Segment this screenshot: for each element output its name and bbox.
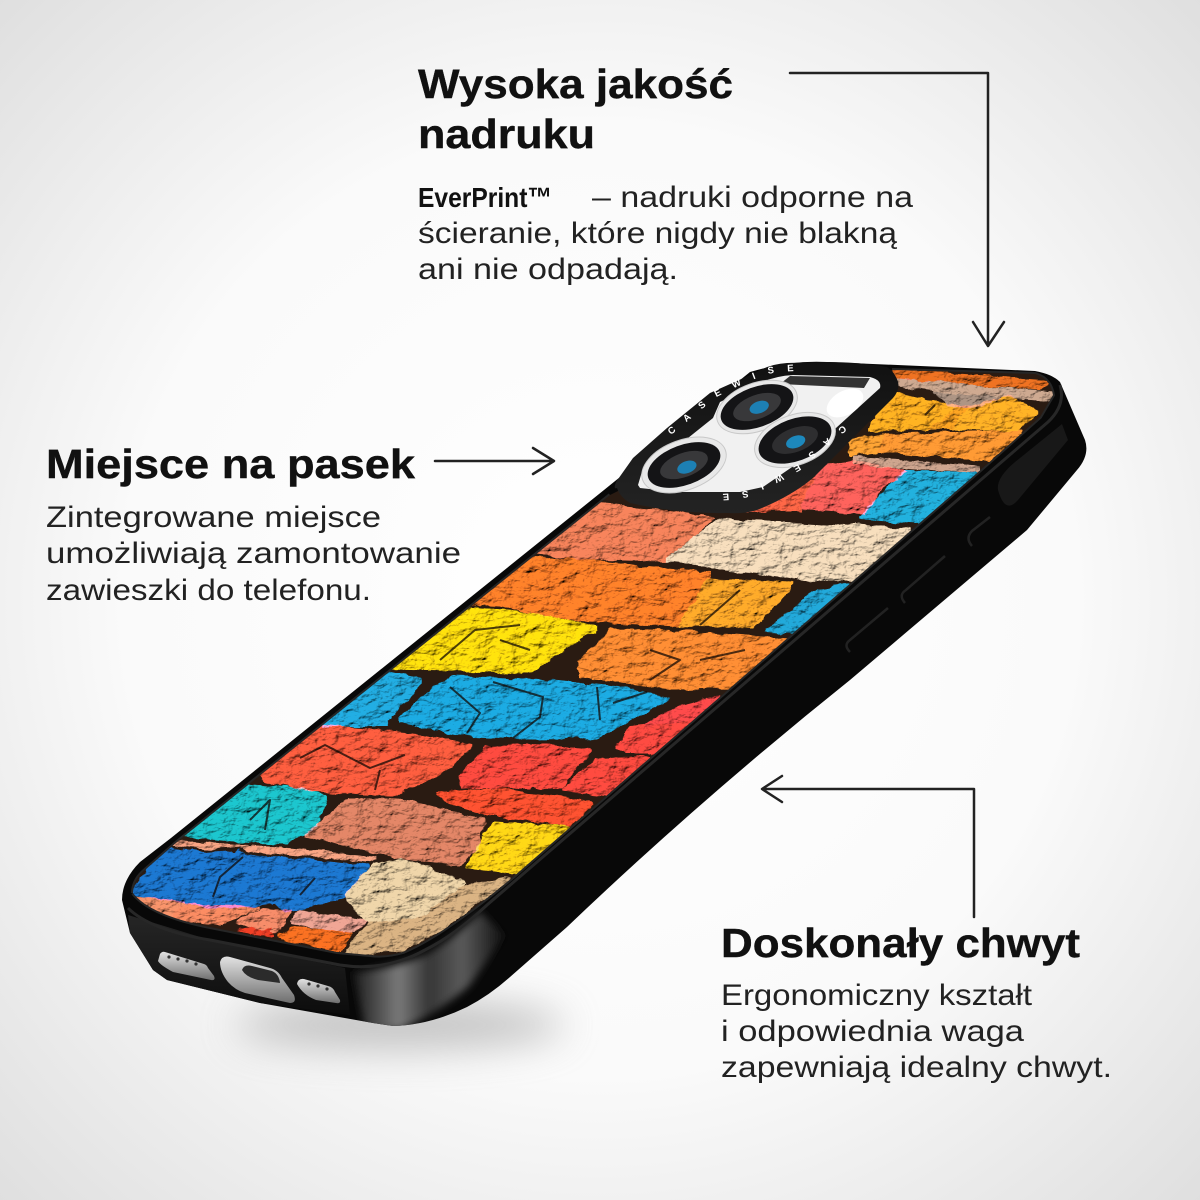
strap slot body: [46, 501, 461, 607]
arrow: to strap slot: [435, 448, 554, 474]
camera window: [638, 375, 880, 492]
strap slot body: umożliwiają zamontowanie: [46, 537, 461, 570]
lens 2: [747, 402, 843, 478]
case bottom face: [128, 915, 350, 1015]
print quality body: – nadruki odporne na: [592, 181, 913, 214]
speaker left: [158, 952, 215, 980]
grip body: i odpowiednia waga: [721, 1015, 1024, 1048]
print quality heading: nadruku: [418, 111, 595, 157]
strap slot heading: Miejsce na pasek: [46, 441, 415, 487]
case rim ridge: [128, 385, 1062, 967]
usb opening: [242, 966, 280, 983]
grip heading: Doskonały chwyt: [721, 920, 1080, 966]
camera window top shade: [780, 376, 870, 388]
charging port area: [158, 952, 340, 1003]
case glossy corner: [353, 912, 505, 1030]
camera ring: [615, 362, 898, 513]
arrow: to print: [790, 73, 1004, 346]
phone shadow: [235, 1001, 565, 1049]
camera module: [614, 362, 898, 514]
grip body: Ergonomiczny kształt: [721, 979, 1033, 1012]
callout: strap slot: [46, 441, 554, 607]
print quality body: ani nie odpadają.: [418, 253, 678, 286]
brick cracks: [213, 405, 935, 897]
print quality heading: [418, 61, 733, 157]
grip body: zapewniają idealny chwyt.: [721, 1051, 1112, 1084]
print quality body: ścieranie, które nigdy nie blakną: [418, 217, 897, 250]
camera ring logo top: CASEWISE: [668, 364, 794, 434]
print quality body: [418, 181, 913, 286]
callout: print quality: [418, 61, 1004, 346]
case body: [122, 362, 1086, 1026]
lens 1: [709, 370, 805, 444]
speaker right: [297, 979, 340, 1003]
brick print: [120, 360, 1070, 970]
usb port: [220, 957, 295, 1003]
case side buttons: [846, 424, 1068, 652]
grip body: [721, 979, 1112, 1084]
camera flash: [822, 383, 868, 423]
strap slot body: zawieszki do telefonu.: [46, 574, 371, 607]
strap slot body: Zintegrowane miejsce: [46, 501, 381, 534]
print quality heading: Wysoka jakość: [418, 61, 733, 107]
case rim highlight: [133, 370, 1053, 956]
lens 3: [634, 426, 734, 504]
camera ring logo bottom: CASEWISE: [722, 426, 846, 500]
print quality body: EverPrint™: [418, 182, 552, 213]
arrow: to grip: [762, 776, 974, 917]
callout: grip: [721, 776, 1112, 1084]
phone case: [122, 362, 1086, 1026]
